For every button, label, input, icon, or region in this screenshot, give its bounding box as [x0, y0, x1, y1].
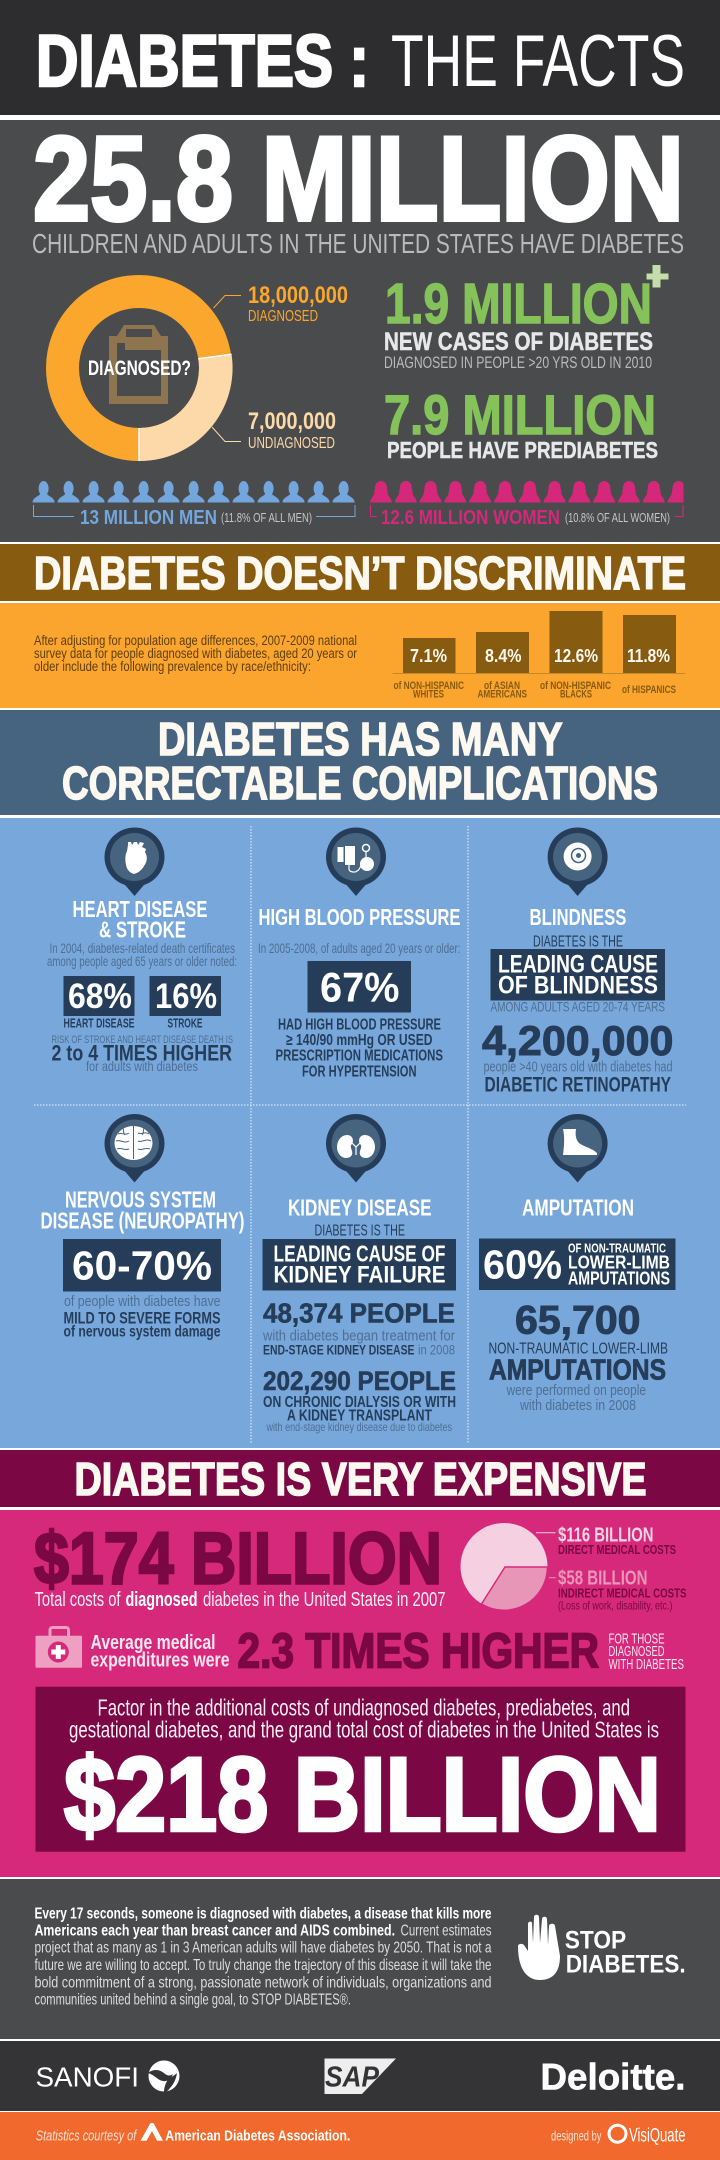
stat: new cases [384, 265, 668, 372]
panel: stop diabetes message [0, 1879, 720, 2039]
cell: kidney disease: in 2008 [418, 1342, 455, 1358]
cell: high blood pressure [258, 828, 460, 1080]
pictogram: men [33, 481, 355, 529]
cell: heart disease and stroke: for adults with diabetes [86, 1058, 198, 1074]
text block: call to action: communities united behind a single goal, to STOP DIABETES®. [34, 1992, 351, 2008]
bar chart: prevalence by race: 8.4% [485, 646, 522, 666]
pictogram: women: 12.6 MILLION WOMEN [381, 507, 560, 529]
panel: sponsor logos [0, 2041, 720, 2111]
panel: complications grid [0, 818, 720, 1448]
donut chart: diagnosed vs undiagnosed: DIAGNOSED? [88, 357, 191, 380]
callout: indirect costs: $58 BILLION [558, 1568, 648, 1590]
text block: call to action: project that as many as 1 in 3 American adults will have diabetes by 2050. That is not a [34, 1940, 492, 1956]
cell: heart disease and stroke: 68% [68, 977, 132, 1016]
callout: undiagnosed: UNDIAGNOSED [248, 435, 335, 452]
logo: stop diabetes [518, 1915, 686, 1980]
callout: diagnosed: 18,000,000 [248, 282, 348, 309]
cell: amputation: LOWER-LIMB [568, 1252, 670, 1272]
callout: direct costs [536, 1524, 676, 1557]
cell: amputation: OF NON-TRAUMATIC [568, 1242, 666, 1256]
callout: indirect costs [549, 1568, 686, 1612]
pictogram: men: 13 MILLION MEN [80, 507, 217, 529]
bar chart: prevalence by race: of HISPANICS [622, 684, 676, 696]
text block: prevalence intro: After adjusting for population age differences, 2007-2009 national [34, 633, 357, 648]
stat: new cases: 1.9 MILLION [385, 272, 652, 336]
heading band: correctable complications: DIABETES HAS MANY [158, 713, 562, 765]
pictogram: women: (10.8% OF ALL WOMEN) [565, 510, 670, 525]
stat: 174 billion: diabetes in the United States in 2007 [203, 1589, 446, 1611]
callout: indirect costs: (Loss of work, disability, etc.) [558, 1598, 672, 1612]
stat: 2.3 times higher: DIAGNOSED [608, 1643, 665, 1660]
text block: call to action: Every 17 seconds, someone is diagnosed with diabetes, a disease that kills more [34, 1906, 492, 1922]
cell: heart disease and stroke: RISK OF STROKE AND HEART DISEASE DEATH IS [52, 1034, 233, 1046]
heading band: correctable complications [0, 710, 720, 815]
cell: kidney disease: KIDNEY FAILURE [274, 1262, 446, 1288]
cell: heart disease and stroke: & STROKE [99, 916, 186, 942]
cell: high blood pressure: HIGH BLOOD PRESSURE [258, 904, 460, 930]
header: title [0, 0, 720, 115]
cell: blindness: OF BLINDNESS [498, 972, 658, 1000]
cell: kidney disease: DIABETES IS THE [314, 1222, 405, 1240]
stat: 2.3 times higher: FOR THOSE [608, 1630, 664, 1648]
footer: credits [0, 2112, 720, 2160]
bar chart: prevalence by race: of NON-HISPANIC [394, 680, 464, 692]
icon: medical kit [36, 1628, 82, 1668]
callout: direct costs: DIRECT MEDICAL COSTS [558, 1543, 676, 1557]
cell: heart disease and stroke: In 2004, diabetes-related death certificates [50, 940, 235, 956]
logo: VisiQuate: VisiQuate [629, 2126, 686, 2146]
cell: high blood pressure: ≥ 140/90 mmHg OR USED [286, 1032, 432, 1049]
callout: undiagnosed [212, 408, 336, 452]
panel: costs [0, 1510, 720, 1877]
cell: blindness: LEADING CAUSE [498, 950, 658, 978]
cell: amputation: AMPUTATION [522, 1194, 634, 1220]
logo: sanofi: SANOFI [36, 2062, 139, 2092]
bar chart: prevalence by race: WHITES [413, 688, 444, 700]
icon: clipboard [109, 325, 168, 404]
cell: heart disease and stroke: HEART DISEASE [72, 896, 208, 922]
cell: kidney disease: 202,290 PEOPLE [263, 1366, 456, 1396]
cell: kidney disease: KIDNEY DISEASE [288, 1194, 432, 1220]
cell: high blood pressure: HAD HIGH BLOOD PRESSURE [278, 1016, 441, 1034]
text block: call to action: Current estimates [400, 1922, 492, 1940]
cell: blindness: DIABETES IS THE [533, 934, 623, 950]
pictogram: men: (11.8% OF ALL MEN) [221, 510, 312, 525]
cell: high blood pressure: FOR HYPERTENSION [302, 1064, 416, 1080]
logo: American Diabetes Association: American Diabetes Association. [165, 2128, 350, 2144]
callout: diagnosed: DIAGNOSED [248, 308, 318, 325]
cell: blindness: 4,200,000 [482, 1017, 674, 1064]
callout: indirect costs: INDIRECT MEDICAL COSTS [558, 1586, 686, 1600]
pictogram: women [370, 481, 684, 524]
text block: call to action: Americans each year than breast cancer and AIDS combined. [34, 1922, 395, 1940]
callout: undiagnosed: 7,000,000 [248, 408, 336, 435]
logo: SAP: SAP [325, 2062, 380, 2094]
bar chart: prevalence by race: 11.8% [627, 646, 670, 666]
cell: kidney disease [262, 1114, 456, 1434]
text block: prevalence intro: older include the following prevalence by race/ethnicity: [34, 659, 311, 674]
cell: kidney disease: A KIDNEY TRANSPLANT [287, 1408, 432, 1424]
cell: amputation: were performed on people [506, 1382, 646, 1399]
cell: nervous system disease: NERVOUS SYSTEM [65, 1186, 216, 1212]
logo: stop diabetes: DIABETES. [566, 1950, 686, 1978]
header: title: DIABETES : [36, 21, 369, 102]
cell: kidney disease: with diabetes began treatment for [262, 1328, 455, 1344]
text block: call to action: bold commitment of a strong, passionate network of individuals, organizations and [34, 1974, 492, 1992]
cell: heart disease and stroke: among people aged 65 years or older noted: [47, 953, 237, 969]
cell: heart disease and stroke [47, 828, 237, 1074]
stat: 2.3 times higher: expenditures were [90, 1650, 230, 1672]
cell: kidney disease: with end-stage kidney disease due to diabetes [266, 1420, 452, 1434]
stat: 174 billion: $174 BILLION [34, 1518, 442, 1600]
bar chart: prevalence by race: BLACKS [560, 688, 592, 700]
cell: heart disease and stroke: 16% [155, 977, 217, 1016]
cell: nervous system disease: MILD TO SEVERE FORMS [64, 1310, 220, 1328]
cell: amputation: 65,700 [515, 1298, 640, 1342]
bar chart: prevalence by race: of ASIAN [484, 680, 520, 692]
bar chart: prevalence by race: of NON-HISPANIC [540, 680, 611, 692]
callout: diagnosed [214, 282, 348, 325]
cell: kidney disease: END-STAGE KIDNEY DISEASE [263, 1342, 414, 1358]
icon: heart [125, 842, 147, 874]
cell: amputation: with diabetes in 2008 [519, 1397, 636, 1414]
cell: nervous system disease [40, 1114, 244, 1340]
text block: prevalence intro: survey data for people diagnosed with diabetes, aged 20 years or [34, 646, 357, 661]
icon: brain [114, 1126, 152, 1160]
bar chart: prevalence by race: AMERICANS [478, 688, 527, 700]
cell: heart disease and stroke: STROKE [168, 1016, 203, 1030]
cell: heart disease and stroke: 2 to 4 TIMES HIGHER [52, 1040, 232, 1066]
cell: high blood pressure: 67% [320, 964, 400, 1010]
donut chart: diagnosed vs undiagnosed [62, 292, 233, 461]
stat: new cases: NEW CASES OF DIABETES [384, 328, 653, 356]
panel: prevalence overview [32, 134, 684, 524]
cell: amputation: 60% [483, 1242, 562, 1288]
logo: American Diabetes Association [140, 2123, 350, 2144]
footer: credits: designed by [551, 2128, 602, 2144]
cell: kidney disease: LEADING CAUSE OF [274, 1240, 446, 1266]
cell: amputation: AMPUTATIONS [568, 1268, 670, 1288]
cell: amputation: AMPUTATIONS [489, 1354, 666, 1386]
callout: total cost [36, 1687, 686, 1854]
logo: stop diabetes: STOP [565, 1926, 626, 1954]
stat: prediabetes [384, 383, 658, 463]
panel: race and ethnicity prevalence [0, 603, 720, 708]
icon: eye [564, 842, 592, 870]
cell: kidney disease: 48,374 PEOPLE [263, 1298, 455, 1328]
cell: blindness: BLINDNESS [530, 904, 626, 930]
stat: 174 billion: Total costs of [34, 1589, 121, 1611]
icon: blood pressure cuff [338, 844, 374, 872]
cell: blindness [482, 828, 674, 1096]
text block: prevalence intro [34, 633, 357, 674]
cell: nervous system disease: DISEASE (NEUROPATHY) [40, 1208, 244, 1234]
bar chart: prevalence by race: 7.1% [410, 646, 447, 666]
cell: high blood pressure: In 2005-2008, of adults aged 20 years or older: [258, 940, 460, 956]
logo: VisiQuate [609, 2125, 686, 2146]
stat: 2.3 times higher: Average medical [90, 1632, 216, 1654]
stat: 174 billion: diagnosed [126, 1589, 198, 1611]
text block: call to action: future we are willing to accept. To truly change the trajectory of this disease it will take the [34, 1957, 492, 1974]
bar chart: prevalence by race: 12.6% [554, 646, 598, 666]
cell: nervous system disease: of nervous system damage [64, 1324, 221, 1340]
cell: high blood pressure: PRESCRIPTION MEDICATIONS [276, 1048, 443, 1064]
logo: deloitte: Deloitte. [540, 2056, 686, 2098]
text block: call to action [34, 1906, 492, 2008]
stat: 2.3 times higher: 2.3 TIMES HIGHER [238, 1624, 599, 1678]
callout: direct costs: $116 BILLION [558, 1524, 654, 1546]
cell: nervous system disease: of people with diabetes have [64, 1293, 220, 1310]
pie chart: direct vs indirect costs [460, 1523, 548, 1610]
stat: prediabetes: 7.9 MILLION [384, 383, 656, 446]
cell: heart disease and stroke: HEART DISEASE [64, 1016, 135, 1030]
icon: kidneys [337, 1135, 375, 1158]
icon: foot [563, 1129, 597, 1155]
footer: credits: Statistics courtesy of [36, 2128, 138, 2144]
bar chart: prevalence by race [392, 611, 686, 700]
stat: prediabetes: PEOPLE HAVE PREDIABETES [387, 437, 658, 463]
cell: nervous system disease: 60-70% [72, 1242, 212, 1288]
cell: amputation [479, 1114, 676, 1414]
cell: kidney disease: ON CHRONIC DIALYSIS OR WITH [263, 1394, 456, 1411]
